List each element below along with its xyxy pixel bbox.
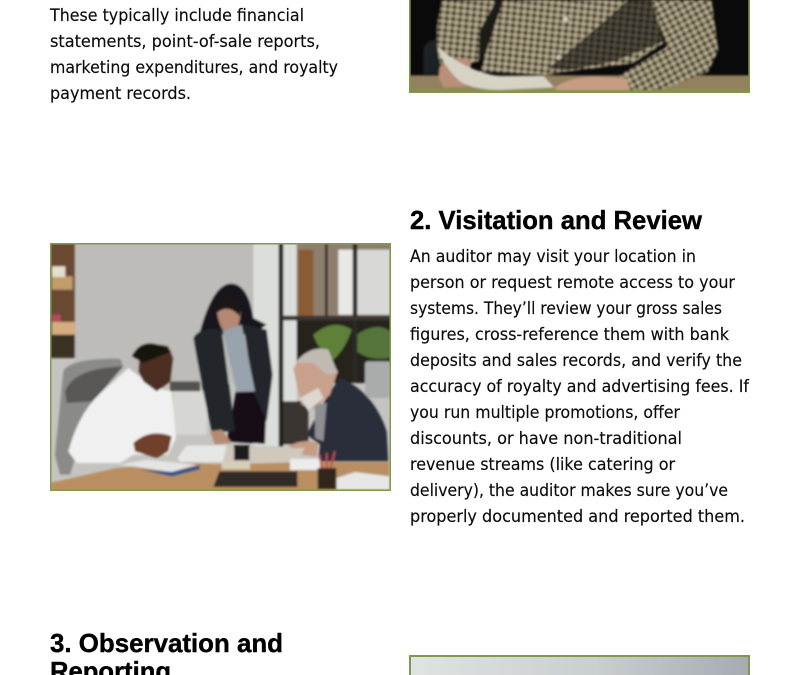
papers on desk <box>177 445 227 462</box>
photo: three colleagues reviewing documents at a desk <box>50 243 391 491</box>
folder <box>213 471 297 487</box>
text block: visitation and review body: discounts, or have non-traditional <box>410 429 682 448</box>
text block: records intro: These typically include financial <box>49 6 304 25</box>
wall and shelving background <box>75 243 253 383</box>
desk surface <box>50 462 389 491</box>
text block: visitation and review body <box>410 247 750 526</box>
text block: visitation and review body: deposits and sales records, and verify the <box>410 351 742 370</box>
office chair <box>55 359 123 475</box>
seated older man <box>307 378 388 461</box>
text block: visitation and review body: An auditor may visit your location in <box>410 247 696 266</box>
heading: 2. Visitation and Review: 2. Visitation and Review <box>410 205 703 235</box>
text block: visitation and review body: systems. They’ll review your gross sales <box>410 299 722 318</box>
text block: records intro: marketing expenditures, and royalty <box>50 58 338 77</box>
text block: records intro: statements, point-of-sale reports, <box>50 32 320 51</box>
heading: 3. Observation and Reporting <box>50 628 283 675</box>
text block: records intro <box>49 6 338 103</box>
standing woman <box>200 284 267 335</box>
text block: visitation and review body: delivery), the auditor makes sure you’ve <box>410 481 728 500</box>
text block: records intro: payment records. <box>50 84 191 103</box>
seated man in white shirt <box>68 368 176 463</box>
printer <box>170 381 200 391</box>
text block: visitation and review body: revenue streams (like catering or <box>410 455 675 474</box>
text block: visitation and review body: properly documented and reported them. <box>410 507 745 526</box>
photo: cropped top of third image <box>410 656 749 675</box>
heading: 3. Observation and Reporting: 3. Observation and <box>50 628 283 658</box>
text block: visitation and review body: person or request remote access to your <box>410 273 735 292</box>
text block: visitation and review body: accuracy of royalty and advertising fees. If <box>410 377 750 396</box>
text block: visitation and review body: figures, cross-reference them with bank <box>410 325 729 344</box>
text block: visitation and review body: you run multiple promotions, offer <box>410 403 680 422</box>
photo: person in checked shirt holding papers <box>409 0 750 93</box>
pen cup <box>318 468 336 489</box>
